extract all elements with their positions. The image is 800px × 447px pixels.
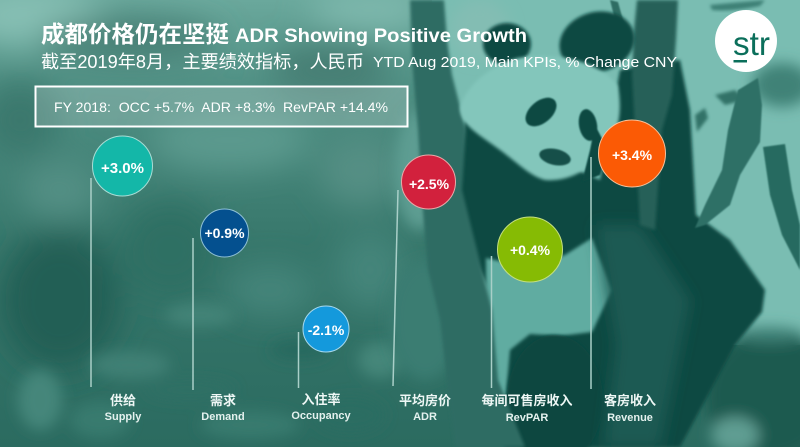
background: bright sky on right xyxy=(389,0,800,447)
metric: RevPAR: 每间可售房收入 xyxy=(481,393,573,408)
metric: occupancy: -2.1% xyxy=(308,322,345,338)
subtitle: 截至2019年8月，主要绩效指标，人民币 xyxy=(41,52,364,72)
metric: revenue: +3.4% xyxy=(612,147,653,163)
FY 2018 summary box: FY 2018: OCC +5.7% ADR +8.3% RevPAR +14.4% xyxy=(54,99,388,115)
panda ears xyxy=(483,3,641,81)
metric: occupancy: Occupancy xyxy=(291,410,352,422)
logo: str: str xyxy=(733,25,770,62)
metric: supply: +3.0% xyxy=(101,160,144,177)
subtitle xyxy=(41,52,677,72)
metric: RevPAR: RevPAR xyxy=(506,412,548,424)
metric: ADR: ADR xyxy=(413,411,437,423)
panda chest fur xyxy=(486,238,612,400)
panda arm xyxy=(596,225,690,447)
tree trunk centre xyxy=(632,0,678,230)
metric: supply: 供给 xyxy=(110,393,136,408)
stump far right xyxy=(763,144,800,270)
metric: occupancy xyxy=(291,306,352,422)
metric: demand: Demand xyxy=(201,411,245,423)
metric: supply xyxy=(91,136,152,423)
metric: occupancy: 入住率 xyxy=(301,392,341,407)
panda belly shadow xyxy=(507,335,603,447)
title xyxy=(41,21,527,47)
metric: demand: 需求 xyxy=(210,393,236,408)
title: 成都价格仍在坚挺 xyxy=(41,21,229,47)
metric: revenue: Revenue xyxy=(607,412,653,424)
panda face xyxy=(520,92,608,182)
metric: demand: +0.9% xyxy=(204,225,245,241)
metric: supply: Supply xyxy=(105,411,142,423)
title: ADR Showing Positive Growth xyxy=(235,25,527,47)
metric: RevPAR xyxy=(481,217,573,424)
metric: revenue: 客房收入 xyxy=(604,393,656,408)
panda head xyxy=(460,56,620,180)
metric: ADR xyxy=(393,155,456,423)
metric: demand xyxy=(193,209,248,423)
metric: ADR: 平均房价 xyxy=(399,393,451,408)
metric: ADR: +2.5% xyxy=(409,176,450,192)
panda body xyxy=(450,60,765,447)
logo: str xyxy=(715,10,777,72)
FY 2018 summary box xyxy=(36,86,408,126)
broken branch right xyxy=(695,78,762,228)
tree trunk left xyxy=(410,0,525,447)
metric: revenue xyxy=(591,120,666,424)
metric: RevPAR: +0.4% xyxy=(510,242,551,258)
subtitle: YTD Aug 2019, Main KPIs, % Change CNY xyxy=(373,54,677,71)
